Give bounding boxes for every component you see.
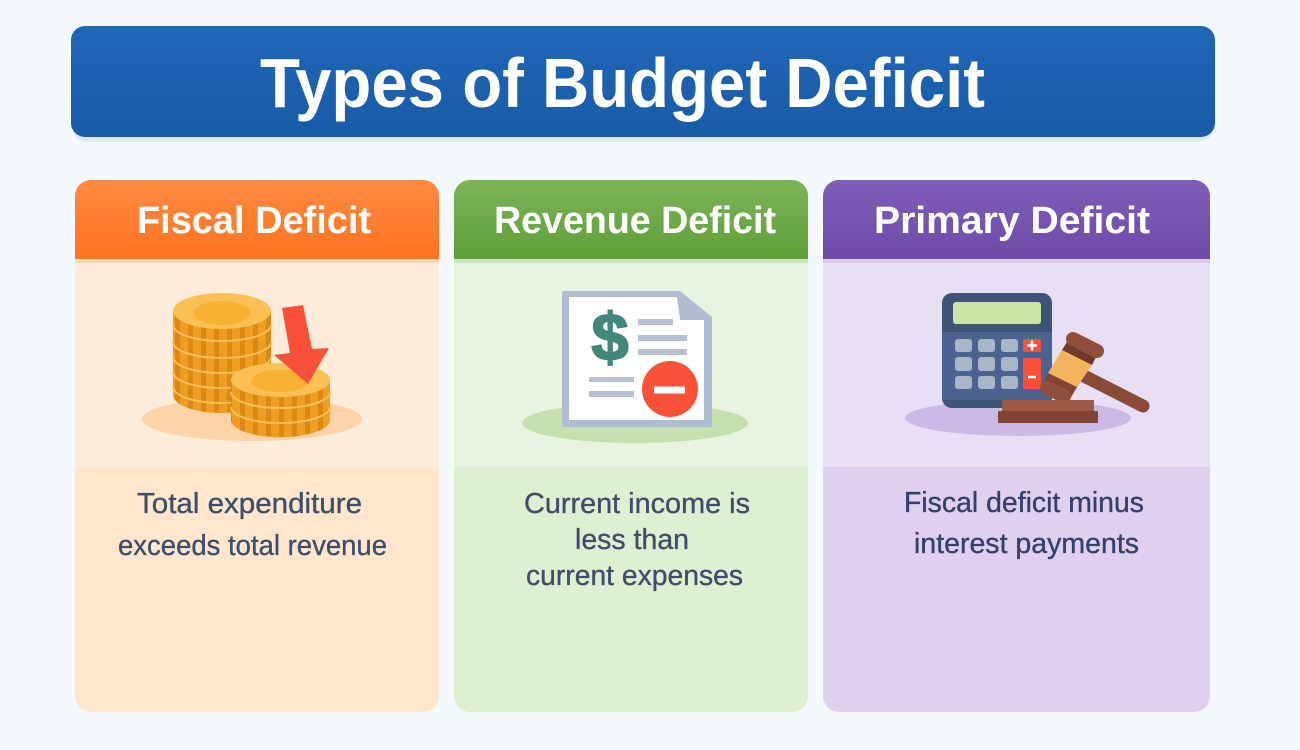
text: primary deficit description	[904, 487, 1144, 560]
icon: document with minus: $	[591, 300, 629, 375]
text: primary deficit description: interest payments	[914, 528, 1139, 560]
panel: primary deficit	[823, 180, 1210, 712]
text: revenue deficit description: current expenses	[526, 560, 743, 592]
text: primary deficit description: Fiscal deficit minus	[904, 487, 1144, 519]
text: fiscal deficit description	[118, 488, 387, 562]
icon: calculator and gavel	[905, 293, 1143, 436]
text: fiscal deficit description: exceeds total revenue	[118, 530, 387, 562]
panel: fiscal deficit	[75, 180, 439, 712]
icon: document with minus	[522, 291, 748, 443]
icon: coins with down arrow	[142, 293, 362, 441]
text: revenue deficit description: Current income is	[524, 488, 750, 520]
heading: fiscal deficit: Fiscal Deficit	[137, 200, 371, 242]
text: revenue deficit description	[524, 488, 750, 592]
title: Types of Budget Deficit	[260, 44, 985, 122]
title banner	[71, 26, 1215, 142]
heading: primary deficit: Primary Deficit	[874, 200, 1150, 242]
heading: revenue deficit: Revenue Deficit	[494, 200, 776, 242]
text: fiscal deficit description: Total expenditure	[137, 488, 362, 520]
text: revenue deficit description: less than	[575, 524, 689, 556]
panel: revenue deficit	[454, 180, 808, 712]
